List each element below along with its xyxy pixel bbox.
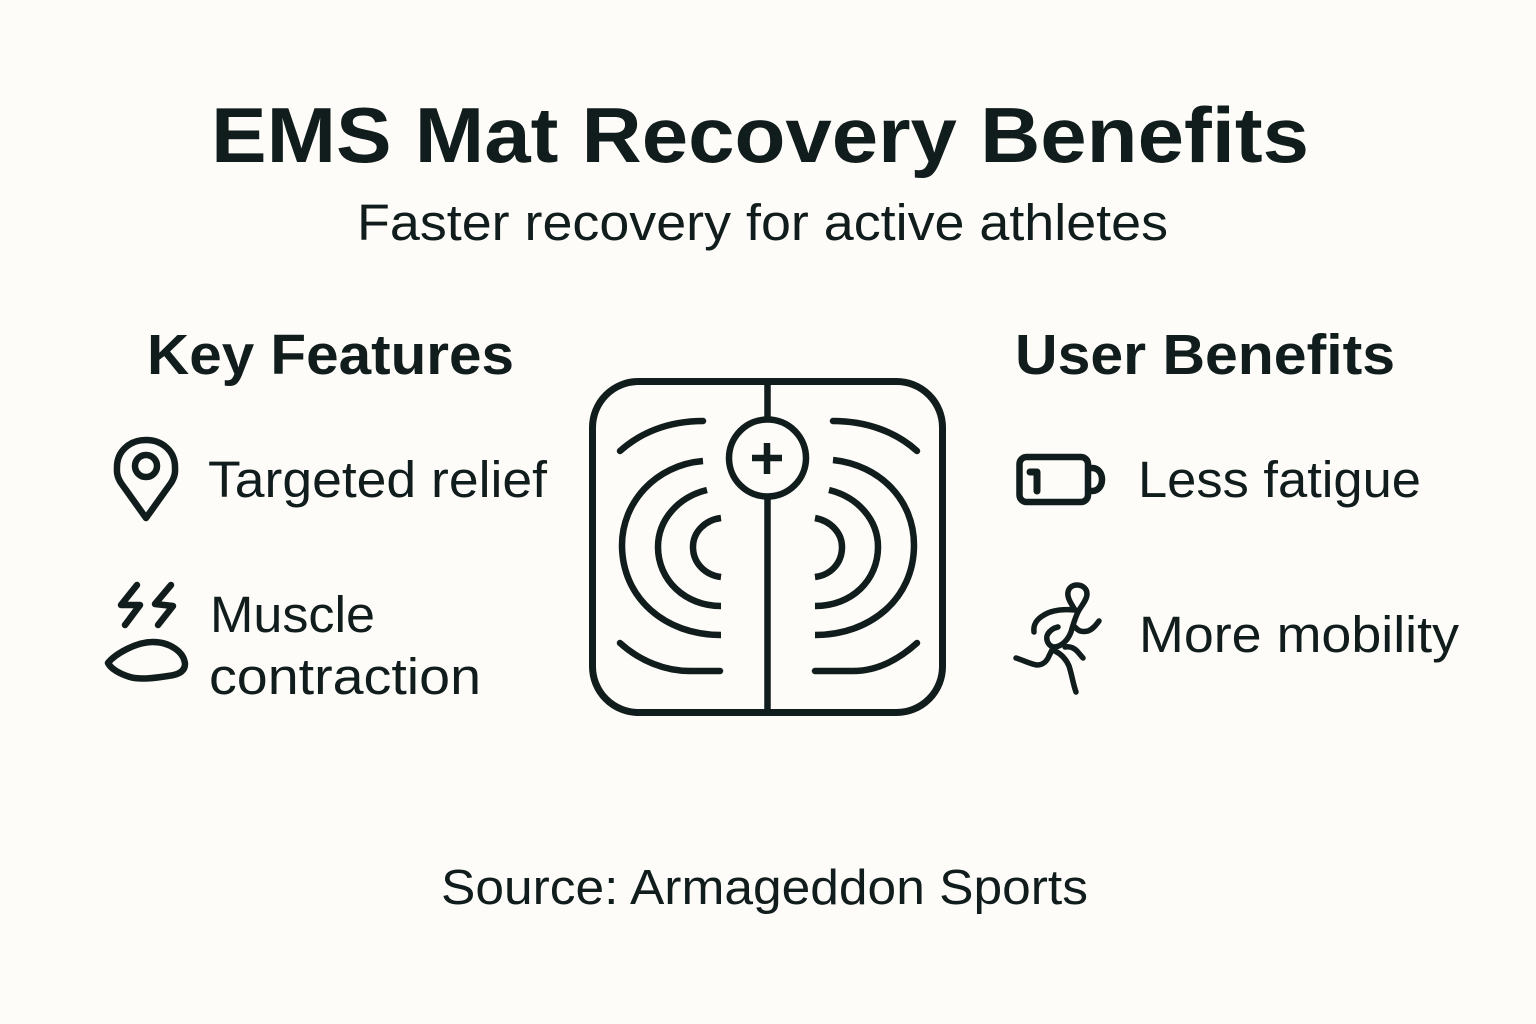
panel: key features (108, 323, 548, 705)
text: less fatigue: Less fatigue (1138, 451, 1421, 508)
text: muscle contraction: contraction (209, 648, 481, 705)
text: muscle contraction (209, 586, 481, 705)
title: EMS Mat Recovery Benefits (211, 91, 1309, 179)
icon: running figure (1016, 585, 1099, 692)
icon: lightning bolts and muscle (108, 585, 185, 679)
heading: key features: Key Features (147, 323, 514, 387)
panel: user benefits (1015, 323, 1460, 692)
icon: location pin (117, 440, 175, 518)
text: more mobility: More mobility (1139, 606, 1460, 663)
icon: low battery (1020, 457, 1102, 502)
subtitle: Faster recovery for active athletes (357, 194, 1168, 251)
text: targeted relief: Targeted relief (208, 451, 548, 508)
central icon: EMS mat (592, 382, 942, 712)
heading: user benefits: User Benefits (1015, 323, 1395, 387)
text: muscle contraction: Muscle (210, 586, 375, 643)
source credit: Source: Armageddon Sports (441, 861, 1088, 915)
